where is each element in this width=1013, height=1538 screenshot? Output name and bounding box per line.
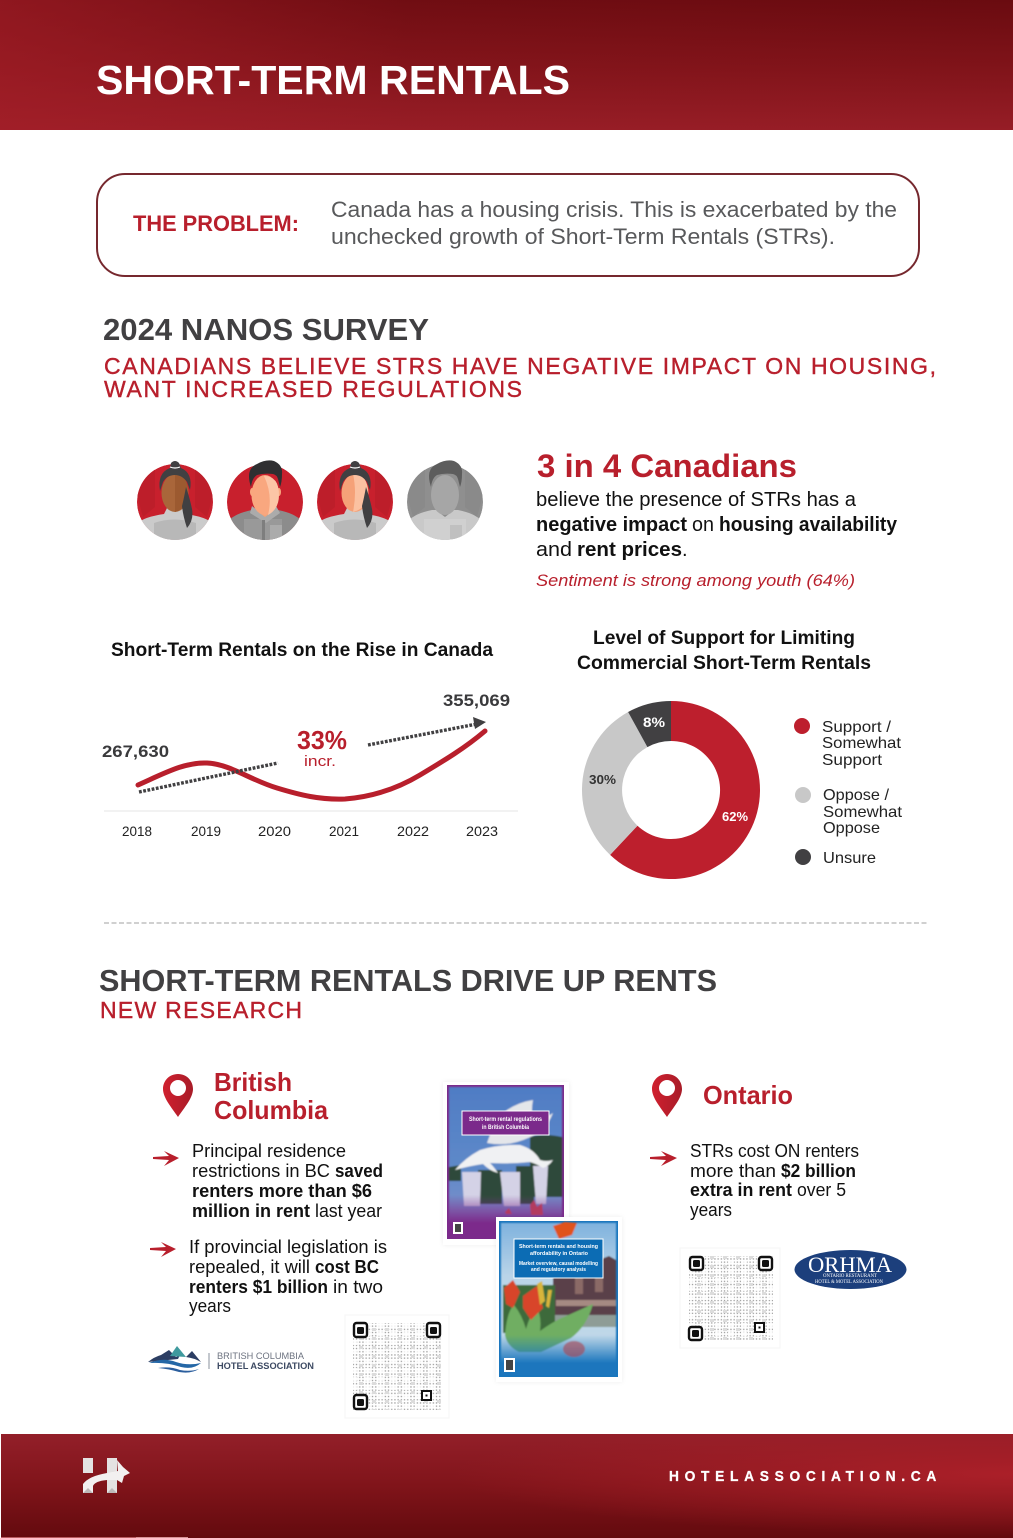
bullet: cost to renters (690, 1141, 859, 1220)
donut segments (582, 701, 760, 879)
footer banner (1, 1434, 1013, 1538)
x axis labels: 2020 (258, 824, 291, 839)
start value: 267,630 (102, 742, 169, 761)
subheading: new research: NEW RESEARCH (100, 997, 302, 1023)
callout heading: 3 in 4 Canadians (537, 448, 797, 484)
chart title: Short-Term Rentals on the Rise in Canada (111, 640, 493, 661)
bullet: provincial legislation: in two (333, 1277, 383, 1297)
bullet: cost to renters: STRs cost ON renters (690, 1141, 859, 1161)
title: SHORT-TERM RENTALS (96, 57, 570, 103)
x axis labels: 2018 (122, 824, 152, 839)
bullet: provincial legislation: cost BC (315, 1257, 379, 1277)
callout text: negative impact (536, 514, 687, 536)
bullet: provincial legislation: If provincial legislation is (189, 1237, 387, 1257)
logo: ORHMA: ORHMA (808, 1252, 892, 1277)
province heading: Ontario (703, 1080, 793, 1110)
heading: 2024 Nanos survey: 2024 NANOS SURVEY (103, 312, 429, 347)
donut values: 30% (589, 772, 616, 787)
bullet: cost to renters: more than (690, 1161, 776, 1181)
callout text: on (692, 514, 714, 536)
increase callout: incr. (304, 753, 336, 770)
icon: woman, dark skin (137, 461, 213, 545)
report cover: Ontario (496, 1217, 622, 1382)
donut title: Level of Support for Limiting (593, 628, 855, 649)
panel: British Columbia (148, 1067, 449, 1418)
cover title: affordability in Ontario (530, 1251, 588, 1257)
icon: arrow (150, 1242, 176, 1257)
QR code (680, 1248, 780, 1348)
red trend line (138, 731, 485, 799)
icon: map pin (652, 1074, 682, 1117)
callout text: housing availability (719, 514, 898, 536)
x axis labels (122, 824, 498, 839)
logo: ORHMA: ONTARIO RESTAURANT (823, 1274, 877, 1279)
legend: Support (822, 752, 883, 769)
line chart: STRs on the rise (102, 640, 518, 839)
legend (794, 718, 903, 867)
bullet: cost to renters: extra in rent (690, 1180, 792, 1200)
subheading: survey finding (104, 353, 936, 402)
cover title: and regulatory analysis (531, 1267, 586, 1273)
youth sentiment note: Sentiment is strong among youth (64%) (536, 571, 855, 590)
heading: STRs drive up rents: SHORT-TERM RENTALS DRIVE UP RENTS (99, 963, 717, 998)
bullet: principal residence: last year (315, 1201, 382, 1221)
panel: the problem (97, 174, 919, 276)
bullet: cost to renters: $2 billion (781, 1161, 856, 1181)
callout text (536, 489, 898, 561)
bullet: principal residence: million in rent (192, 1201, 310, 1221)
legend: Unsure (823, 850, 876, 867)
province heading: Columbia (214, 1095, 329, 1125)
logo: ORHMA (794, 1250, 906, 1289)
bullet: principal residence: renters more than $6 (192, 1181, 372, 1201)
legend: Somewhat (822, 735, 902, 752)
callout text: believe the presence of STRs has a (536, 489, 857, 511)
icon: woman, light skin (317, 461, 393, 545)
icon: arrow (153, 1151, 179, 1166)
subheading: survey finding: WANT INCREASED REGULATIONS (104, 376, 522, 402)
x axis labels: 2023 (466, 824, 498, 839)
legend: Support / (822, 719, 892, 736)
website: HOTELASSOCIATION.CA (669, 1469, 942, 1485)
callout text: . (682, 539, 688, 561)
problem statement: Canada has a housing crisis. This is exacerbated by the (331, 197, 897, 222)
people icons: 3 in 4 (137, 460, 483, 545)
donut title (577, 628, 871, 674)
subheading: survey finding: CANADIANS BELIEVE STRS HAVE NEGATIVE IMPACT ON HOUSING, (104, 353, 936, 379)
logo: BC Hotel Association: BRITISH COLUMBIA (217, 1351, 304, 1361)
problem statement (331, 197, 897, 249)
legend: Somewhat (823, 804, 903, 821)
icon: arrow (650, 1151, 677, 1166)
bullet: provincial legislation: years (189, 1296, 231, 1316)
cover title: Short-term rental regulations (469, 1117, 543, 1123)
logo: BC Hotel Association: HOTEL ASSOCIATION (217, 1361, 314, 1372)
panel: Ontario (650, 1074, 906, 1348)
icon: map pin (163, 1074, 193, 1117)
legend: Oppose (823, 820, 880, 837)
bullet: provincial legislation (189, 1237, 387, 1316)
logo: H mark (83, 1458, 130, 1493)
bullet: cost to renters: years (690, 1200, 732, 1220)
dotted arrow (139, 717, 486, 792)
icon: man, light skin (227, 460, 303, 545)
x axis labels: 2021 (329, 824, 359, 839)
bullet: principal residence: Principal residence (192, 1141, 346, 1161)
cover title: Market overview, causal modelling (519, 1261, 598, 1267)
province heading (214, 1067, 329, 1125)
legend: Oppose / (823, 787, 890, 804)
increase callout (297, 725, 347, 770)
logo: BC Hotel Association (148, 1346, 314, 1373)
donut values (589, 714, 748, 824)
donut title: Commercial Short-Term Rentals (577, 653, 871, 674)
province heading: British (214, 1067, 292, 1097)
report cover: British Columbia (443, 1082, 569, 1245)
bullet: provincial legislation: renters $1 billion (189, 1277, 328, 1297)
x axis labels: 2019 (191, 824, 221, 839)
callout: 3 in 4 Canadians (536, 448, 898, 590)
bullet: cost to renters: over 5 (797, 1180, 846, 1200)
cover title: Short-term rentals and housing (519, 1244, 598, 1250)
bullet: principal residence (192, 1141, 383, 1221)
bullet: provincial legislation: repealed, it will (189, 1257, 310, 1277)
logo: ORHMA: HOTEL & MOTEL ASSOCIATION (815, 1280, 884, 1285)
x axis labels: 2022 (397, 824, 429, 839)
QR code (345, 1315, 449, 1418)
donut values: 62% (722, 809, 748, 824)
bullet: principal residence: saved (335, 1161, 383, 1181)
end value: 355,069 (443, 691, 510, 710)
icon: man, grey (407, 460, 483, 545)
cover title: in British Columbia (482, 1125, 530, 1131)
callout text: and (536, 539, 572, 561)
bullet: principal residence: restrictions in BC (192, 1161, 330, 1181)
callout text: rent prices (577, 539, 682, 561)
donut values: 8% (643, 714, 666, 730)
problem statement: unchecked growth of Short-Term Rentals (STRs). (331, 224, 835, 249)
header banner (0, 0, 1013, 130)
increase callout: 33% (297, 725, 347, 755)
problem label: THE PROBLEM: (133, 211, 299, 236)
donut chart: level of support (577, 628, 903, 879)
cover title (514, 1239, 603, 1278)
cover title (462, 1111, 549, 1135)
